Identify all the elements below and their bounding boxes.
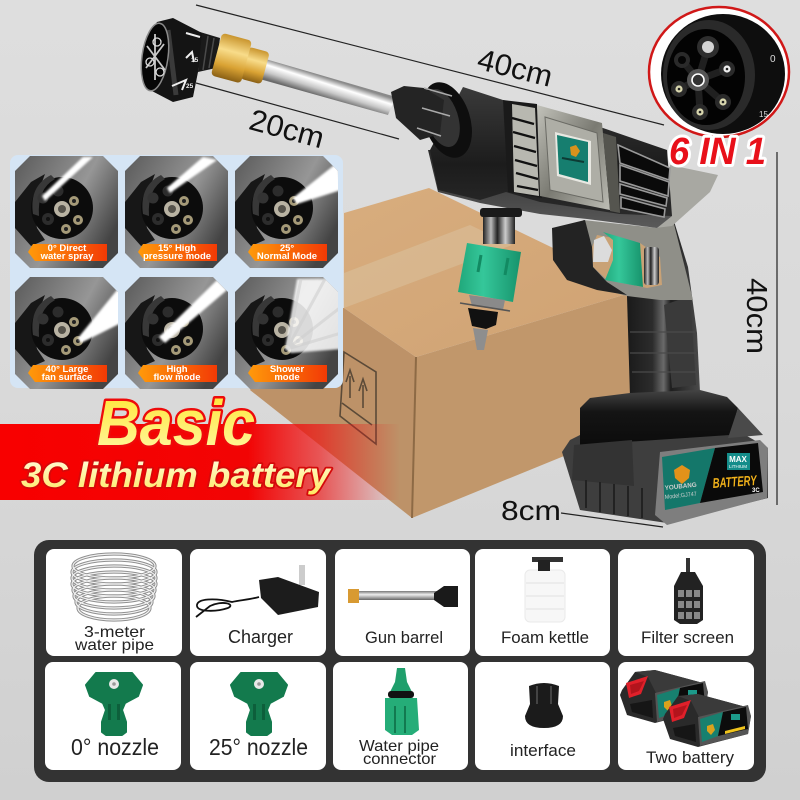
rim marks: 15: [759, 110, 768, 119]
item: interface: [475, 662, 610, 770]
label: interface: [510, 741, 576, 760]
max lithium badge: MAX: [729, 455, 748, 464]
nozzle neck: [198, 32, 220, 72]
mode: 15 degree high pressure: pressure mode: [143, 251, 211, 262]
battery lower body: [562, 432, 768, 523]
mode: 0 degree direct: water spray: [40, 251, 94, 262]
max lithium badge: LITHIUM: [729, 464, 747, 469]
mode: shower: Shower: [270, 364, 304, 375]
nozzle head: 15: [191, 57, 199, 64]
grip ribs: [630, 332, 696, 372]
grip side panels: [664, 296, 696, 388]
battery clip: [572, 440, 634, 486]
mode: 25 degree normal: 25°: [280, 243, 294, 254]
this way up mark: [340, 352, 376, 444]
connector tail: [460, 295, 510, 350]
label: 3-meter: [84, 624, 146, 641]
label: Charger: [228, 627, 293, 647]
icon: foam kettle: [525, 557, 565, 622]
dimension line: 40cm length: [196, 5, 664, 125]
battery upper gloss: [580, 390, 738, 445]
battery feet: [586, 480, 642, 518]
front collar: [391, 76, 481, 164]
item: 25 degree nozzle: [190, 662, 326, 770]
item: foam kettle: [475, 549, 610, 656]
accessories background: [34, 540, 766, 782]
label: 20cm: 20cm: [246, 104, 328, 155]
icon: back battery: [620, 670, 708, 723]
inner plate: [545, 117, 603, 202]
vent housing: [503, 100, 542, 198]
mode: high flow: flow mode: [154, 372, 200, 383]
item: two batteries: [618, 662, 754, 770]
heading: Basic: Basic: [97, 387, 255, 459]
spray gun: [137, 18, 768, 525]
mode: 40 degree fan: 40° Large: [46, 364, 88, 375]
box left face: [250, 308, 416, 518]
rear air vents: [618, 145, 670, 217]
side rib strip: [603, 133, 620, 213]
inset red circle: [649, 7, 789, 137]
item: charger: [190, 549, 326, 656]
battery black label: [700, 443, 763, 503]
inset body: [661, 14, 785, 134]
model text: Model:GJ747: [665, 492, 698, 501]
box right face: [412, 290, 640, 518]
battery word: BATTERY: [712, 472, 758, 491]
mode: high flow: [125, 277, 228, 389]
inset: 6 in 1 nozzle head: [649, 7, 789, 173]
cardboard box: [250, 188, 640, 518]
icon: green nozzle: [86, 673, 142, 735]
6 in 1 title: 6 IN 1: [669, 131, 766, 173]
rear wing: [655, 165, 718, 228]
label: [359, 738, 439, 768]
label: 25° nozzle: [209, 734, 308, 760]
box top face: [344, 188, 640, 357]
mode: 25 degree normal: Normal Mode: [257, 251, 317, 262]
label: Two battery: [646, 748, 734, 767]
mode: shower: [235, 277, 341, 389]
item: 0 degree nozzle: [45, 662, 181, 770]
mode: 0 degree direct: [15, 156, 118, 268]
teal logo plate: [555, 132, 591, 185]
label: Foam kettle: [501, 628, 589, 647]
packing tape: [344, 225, 512, 308]
label: Water pipe: [359, 738, 439, 755]
battery logo: [674, 465, 690, 484]
rim marks: [759, 54, 776, 119]
water inlet upper: [480, 208, 522, 244]
item: water pipe: [46, 549, 182, 656]
icon: filter: [674, 558, 703, 624]
dimension line: 8cm width: [561, 513, 663, 527]
icon: connector: [385, 668, 419, 735]
centre silver plate: [537, 105, 610, 210]
panel background: [10, 155, 343, 388]
mode: 15 degree high pressure: 15° High: [158, 243, 196, 254]
icon: green nozzle: [231, 673, 287, 735]
label: water pipe: [74, 637, 154, 654]
brass coupling: [211, 33, 270, 84]
label: 40cm: 40cm: [474, 43, 556, 94]
mode: 15 degree high pressure: [125, 156, 228, 268]
subheading: 3C lithium battery: 3C lithium battery: [21, 456, 332, 495]
battery pack: [562, 390, 768, 525]
grey label surround: [655, 440, 768, 525]
trigger opening: [592, 235, 662, 288]
grip: [627, 218, 700, 397]
label: [74, 624, 154, 654]
mode: high flow: High: [166, 364, 188, 375]
silver trigger guard: [583, 220, 693, 300]
lower body lobe: [428, 150, 672, 228]
mode: 0 degree direct: 0° Direct: [48, 243, 87, 254]
panel: six spray modes: [10, 155, 343, 389]
mode: shower: mode: [274, 372, 300, 383]
icon: charger: [196, 565, 319, 617]
label: Filter screen: [641, 628, 734, 647]
item: filter screen: [618, 549, 754, 656]
rim marks: 0: [770, 54, 776, 65]
nozzle head: [137, 18, 202, 102]
brand text: YOUBANG: [664, 482, 697, 492]
battery rear wedge: [728, 408, 763, 438]
opening background gap: [593, 236, 612, 262]
dimension line: 40cm height: [776, 152, 778, 505]
icon: barrel: [348, 586, 458, 607]
box corner edge: [412, 357, 416, 518]
panel: included accessories: [34, 540, 766, 782]
battery teal label: [662, 448, 715, 510]
item: gun barrel: [335, 549, 470, 656]
red banner: [0, 424, 400, 500]
label: 40cm height: 40cm: [740, 278, 772, 354]
label: 8cm: 8cm: [501, 495, 561, 526]
3C mark: 3C: [752, 488, 760, 494]
rear black handle bulge: [552, 220, 627, 295]
icon: interface: [525, 683, 563, 728]
label: Gun barrel: [365, 628, 443, 647]
chrome trigger rail: [644, 247, 659, 285]
icon: front battery: [663, 694, 751, 747]
mode: 40 degree fan: fan surface: [42, 372, 92, 383]
label: 0° nozzle: [71, 734, 159, 760]
nozzle head: 25: [186, 83, 194, 90]
gun body: [430, 87, 672, 216]
icon: coil: [72, 554, 156, 620]
label: connector: [363, 751, 437, 768]
green connector: [458, 243, 521, 302]
barrel tube: [256, 58, 396, 115]
item: water pipe connector: [333, 662, 468, 770]
green trigger: [603, 232, 643, 287]
max lithium badge: [727, 453, 750, 470]
mode: 25 degree normal: [235, 156, 341, 268]
dimension line: 20cm barrel: [196, 83, 399, 139]
mode: 40 degree fan: [15, 277, 121, 389]
inset wheel: [663, 20, 755, 130]
